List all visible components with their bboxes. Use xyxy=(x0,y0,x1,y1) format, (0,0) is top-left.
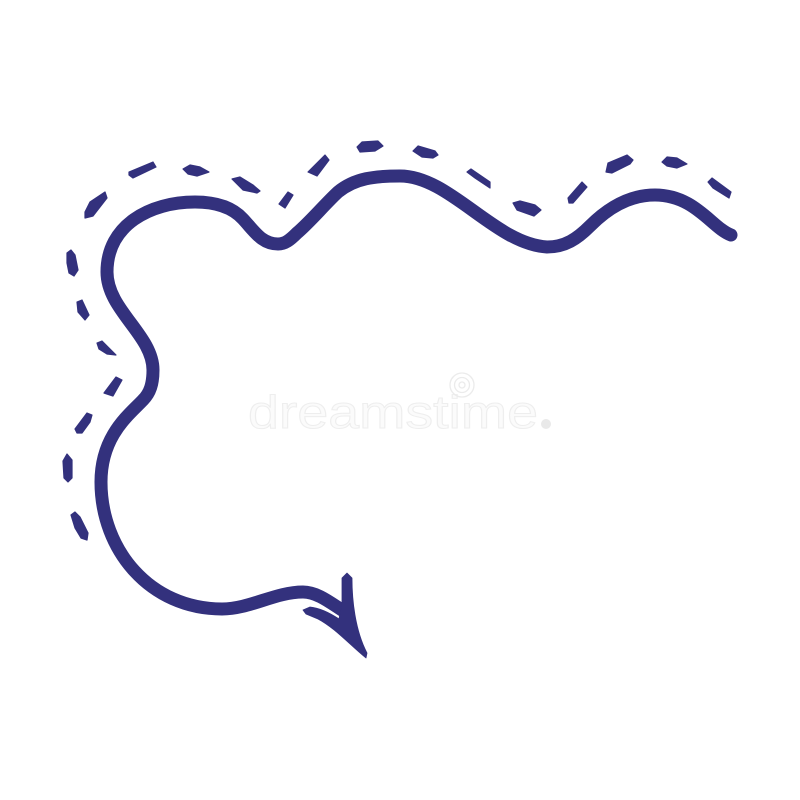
dashed companion line xyxy=(63,141,731,540)
watermark spiral xyxy=(450,373,474,397)
arrowhead xyxy=(303,573,367,658)
watermark wordmark: dreamstime xyxy=(248,386,538,438)
watermark dot xyxy=(541,419,551,429)
watermark: dreamstime logo xyxy=(248,373,551,438)
solid wavy arrow xyxy=(101,176,731,658)
arrow shaft xyxy=(101,176,731,612)
